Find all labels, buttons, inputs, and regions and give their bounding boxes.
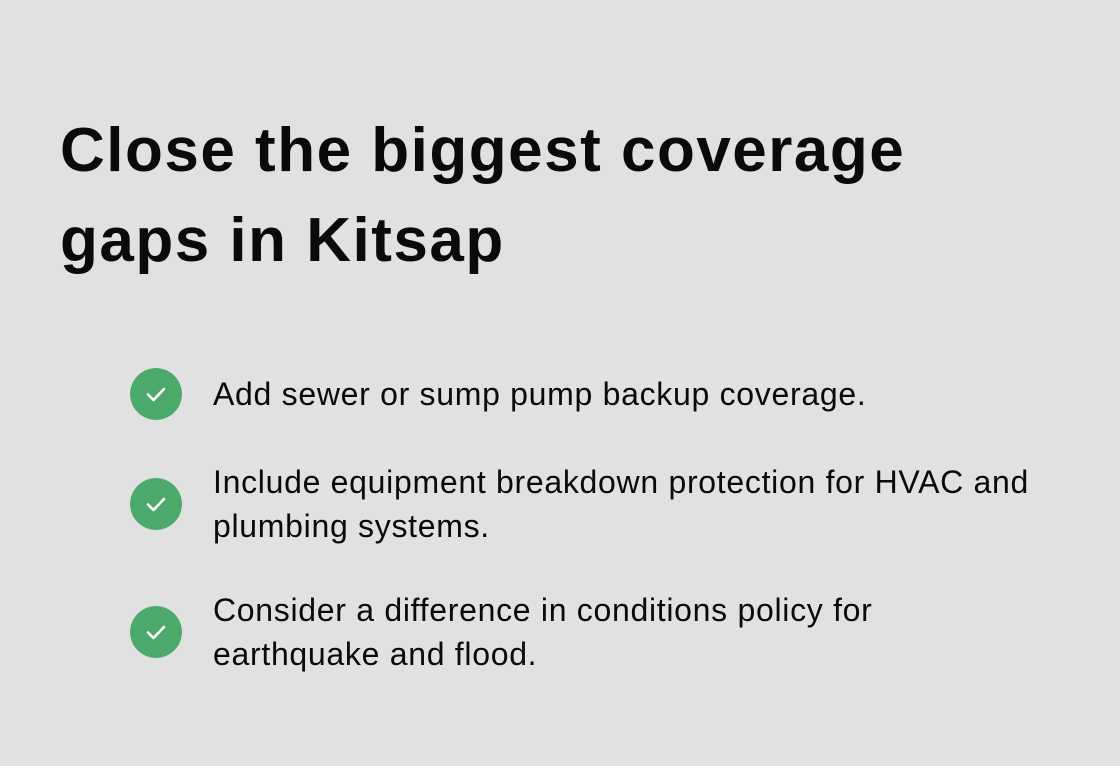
title: gaps in Kitsap — [60, 206, 505, 275]
item 2 — [130, 464, 1029, 544]
item 2: plumbing systems. — [213, 508, 490, 544]
item 1 — [130, 368, 866, 420]
title — [60, 116, 905, 275]
title: Close the biggest coverage — [60, 116, 905, 185]
item 3 — [130, 592, 873, 672]
item 2: Include equipment breakdown protection for HVAC and — [213, 464, 1029, 500]
item 3: earthquake and flood. — [213, 636, 537, 672]
icon: check — [130, 606, 182, 658]
icon: check — [130, 368, 182, 420]
item 3: Consider a difference in conditions policy for — [213, 592, 873, 628]
icon: check — [130, 478, 182, 530]
item 1: Add sewer or sump pump backup coverage. — [213, 376, 866, 412]
